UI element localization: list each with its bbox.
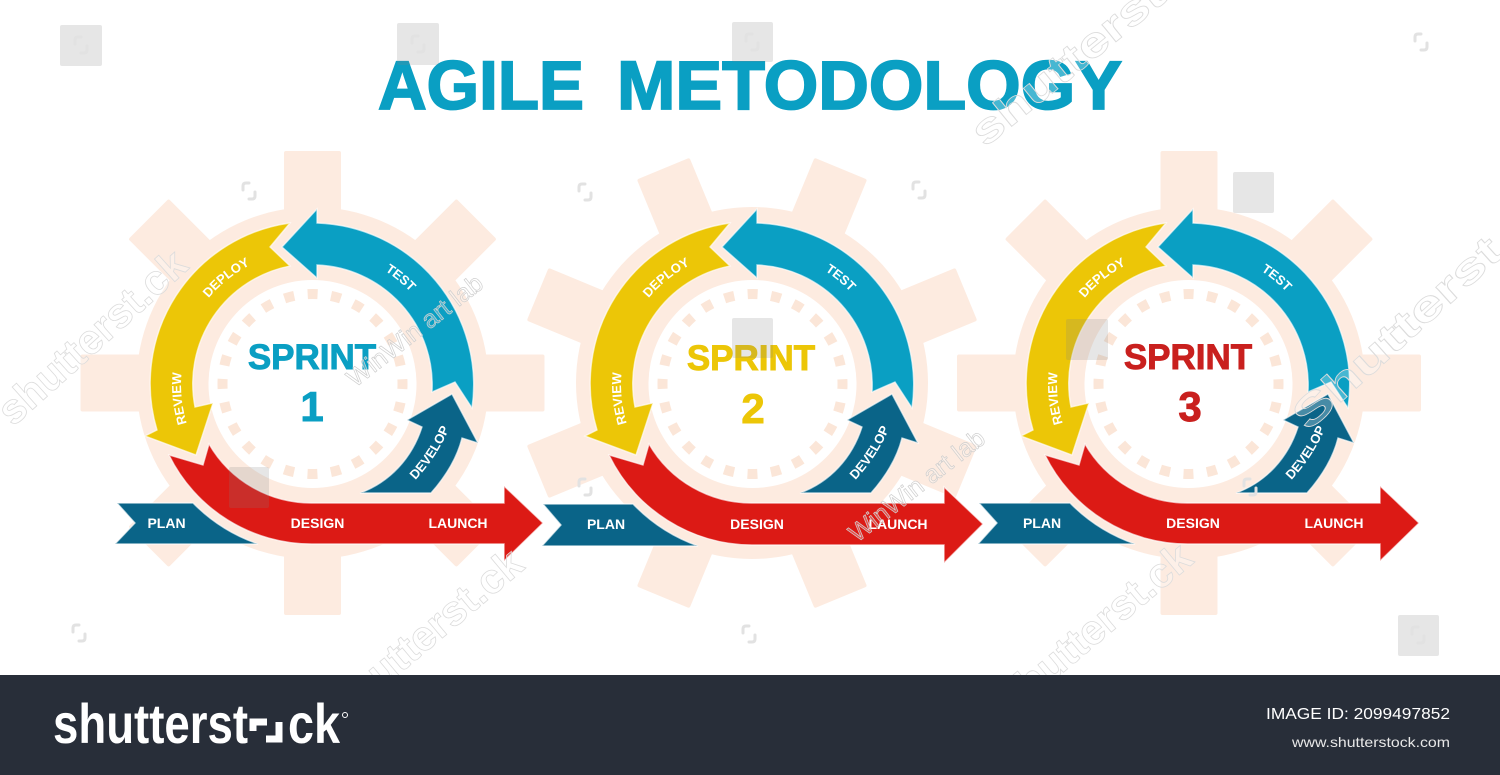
sprint number: 1 — [300, 383, 324, 430]
label: plan: PLAN — [1023, 515, 1061, 531]
arrow: test — [1158, 209, 1350, 408]
inner white circle — [648, 280, 856, 488]
arrow: develop — [800, 394, 918, 493]
inner white circle — [1084, 280, 1292, 488]
sprint number: 3 — [1178, 383, 1202, 430]
watermark text: shutterst — [961, 0, 1173, 155]
watermark text: WinWin art lab — [843, 424, 991, 548]
footer logo: shutterst — [53, 692, 248, 755]
arrow: develop — [360, 394, 478, 493]
label: test: TEST — [1264, 264, 1293, 290]
arrow: test — [722, 209, 914, 408]
arrow: develop — [1236, 394, 1354, 493]
watermark text: shutterst.ck — [988, 532, 1201, 722]
gear: sprint 1 — [80, 151, 544, 615]
arrow: design and launch — [1045, 444, 1419, 561]
label: develop: DEVELOP — [849, 426, 887, 480]
label: launch: LAUNCH — [428, 515, 488, 531]
gear: sprint 3 — [957, 151, 1421, 615]
arrow: plan — [115, 503, 258, 544]
watermark squares — [60, 22, 1439, 656]
dashed ring — [662, 294, 842, 474]
label: plan: PLAN — [587, 516, 625, 532]
dashed ring — [222, 294, 402, 474]
panel: sprint 1 — [80, 151, 544, 615]
title: AGILE — [378, 47, 584, 124]
label: deploy: DEPLOY — [1078, 257, 1124, 298]
watermark text: WinWin art lab — [341, 269, 489, 393]
label: design: DESIGN — [291, 515, 344, 531]
footer logo: ck — [288, 692, 341, 755]
arrow: plan — [542, 504, 698, 546]
label: develop: DEVELOP — [409, 426, 447, 480]
arrow: deploy and review — [585, 223, 730, 455]
panel: sprint 2 — [527, 158, 983, 608]
sprint heading: SPRINT — [1124, 338, 1252, 377]
watermark text: shutterst.ck — [319, 538, 532, 728]
watermark text: Shutterst — [1283, 226, 1500, 439]
arrow: design and launch — [169, 444, 543, 561]
title: METODOLOGY — [617, 47, 1122, 124]
label: review: REVIEW — [172, 372, 186, 425]
sprint heading: SPRINT — [248, 338, 376, 377]
image id: IMAGE ID: 2099497852 — [1266, 706, 1450, 723]
label: launch: LAUNCH — [1304, 515, 1364, 531]
sprint heading: SPRINT — [687, 339, 815, 378]
arrow: deploy and review — [145, 223, 290, 455]
gear: sprint 2 — [449, 80, 1055, 686]
label: test: TEST — [828, 264, 857, 290]
watermark icons — [73, 34, 1427, 643]
panel: sprint 3 — [957, 151, 1421, 615]
label: design: DESIGN — [1166, 515, 1220, 531]
dashed ring — [1098, 294, 1278, 474]
label: deploy: DEPLOY — [202, 257, 248, 298]
label: deploy: DEPLOY — [642, 257, 688, 298]
label: design: DESIGN — [730, 516, 784, 532]
arrow: deploy and review — [1021, 223, 1166, 455]
arrow: design and launch — [609, 444, 983, 563]
arrow: test — [282, 209, 474, 408]
sprint number: 2 — [741, 385, 765, 432]
label: test: TEST — [388, 264, 417, 290]
inner white circle — [208, 280, 416, 488]
label: plan: PLAN — [147, 515, 186, 531]
website: www.shutterstock.com — [1291, 734, 1450, 750]
label: launch: LAUNCH — [868, 516, 928, 532]
title — [378, 47, 1122, 124]
footer bar — [0, 675, 1500, 775]
arrow: plan — [978, 503, 1135, 544]
label: develop: DEVELOP — [1285, 426, 1323, 480]
label: review: REVIEW — [1048, 372, 1062, 425]
label: review: REVIEW — [612, 372, 626, 425]
